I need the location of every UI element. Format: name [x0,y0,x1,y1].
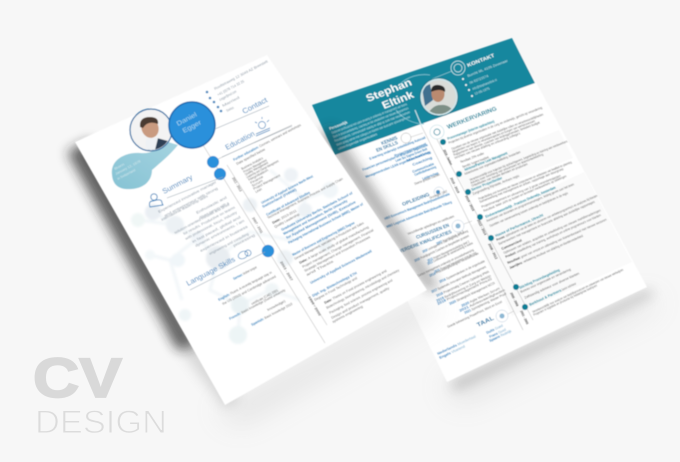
job entries [447,106,624,317]
name: Stephan Eltink: Stephan [364,78,414,105]
education entries: Quality Management [244,161,269,176]
courses list: 2015 Financieel management voor de zorg [434,251,477,274]
education entries: Biotechnology, bioengineering, microbiology and chemistry [325,268,400,310]
education entries: General Management, specializing in Production and Sales [293,221,365,261]
courses list: Goede beheersing PowerPoint, Word en Excel [447,300,503,329]
courses list: 2007 Avondcursus Jaar 3 [436,230,465,246]
skills list: Lean Six Sigma Green Belt [395,147,429,163]
timeline date labels: 2001 - 2005 [519,310,529,325]
education entries: Process Management [242,158,268,174]
language list: Engels Vloeiend [439,344,466,360]
drop caption: Born [113,162,125,171]
education entries: Date: Thesis on Food process engineering and [323,269,388,305]
icon: person [149,194,163,207]
timeline date labels [231,177,322,317]
education entries: Negotiation [247,168,269,182]
language list: the US (2010) and Cambridge advanced [221,274,277,306]
summary text: processing [232,233,256,248]
drop caption: January 12, 1978 [114,159,141,176]
summary text: Enthusiastic and [195,196,228,215]
job entries: Procesmanager (Interim opdrachten) [447,119,496,141]
job entries: Resultaat: beter zicht op kosten en tevreden medewerkers op afdelingen [483,174,567,213]
timeline date labels: 2005 - 2008 [509,292,519,307]
personal statement: Gedreven professional met ruime ervaring in onderwijs en management van teams [331,102,408,135]
courses list: 2019 Projectmanagement Prince2 [437,277,493,306]
education list: HBO Economisch Management Bedrijfsadministratie [384,192,451,221]
job entries: Senior Projectleider [471,176,504,192]
skills heading [375,133,423,154]
icon: bulb [255,117,270,136]
contact list: Married [221,96,240,108]
name circle: Daniel [175,111,198,128]
job entries: Begeleiden van teams in verandertrajecten en borgen van werkprocessen [452,119,536,154]
education entries: Project management, Change management, Financial [301,228,375,269]
personal statement: Resultaatgericht, communicatief vaardig en altijd op zoek naar nieuwe kansen [334,110,411,143]
personal statement: Sterk in procesverbetering, coaching en het ontwikkelen van nieuwe programma's [332,106,409,139]
language list: Spanish: Basic knowledge 2010 [250,302,293,327]
contact list: Rooftstraweg 12 3049 AZ Breestelt [213,60,269,91]
education list: Verschillende opleidingen en certificaten [407,214,455,236]
left sheet paper [75,55,427,405]
education entries: University of Applied Sciences Wadenswil [309,249,373,285]
education entries: Design and product management, quality [330,286,390,320]
job entries: Eindverantwoordelijk - Practices Onderwijs, Amsterdam [485,186,557,219]
name circle: Egger [181,119,204,135]
timeline date labels: 2014 - 2016 [464,195,475,212]
education entries: Quality Leadership [273,212,300,229]
job entries: Advies over inrichting van processen en teamontwikkeling [470,152,544,185]
skills list: Marketing [406,150,431,163]
summary text: engineering and consulting [208,232,249,256]
education list [384,189,455,236]
job entries: Verantwoordelijk voor analyse van bedrijfsprocessen en ontwerpen van nieuwe werkwijzen [532,268,624,314]
education entries: Business Analytics [240,156,264,171]
summary text: Experienced innovative manager [157,180,218,214]
education entries: Packaging, food science, process engineering and [328,278,393,315]
CV: CV [33,346,122,409]
education entries: Finance [249,175,264,185]
heading: contact: Contact [240,95,269,116]
faint section bands [455,130,632,316]
personal statement: Persoonlijk [329,120,349,131]
courses list: 2021 Adviesvaardigheden [459,288,506,313]
right sheet paper [312,38,647,382]
job entries: Zelfstandig adviseur voor diverse klanten [524,271,580,300]
job entries: House of Performance, Utrecht [495,213,545,238]
contact icon [451,61,465,75]
drop caption: in Switzerland [116,168,136,181]
summary text: in fast paced, global and [191,215,241,244]
photo: Stephan portrait [396,71,460,127]
heading: education: Education [223,129,256,152]
language list: Nederlands Moedertaal [437,334,477,356]
heading: contact [215,95,269,129]
contact block: Burcht 96, 4105 Zevenaar [467,58,509,78]
skills list: Financien personeelsplan en afspraken organisatie [362,143,429,172]
skills list: Coaching [412,156,433,167]
job entries: Bureau voor organisatie en verandering [520,267,572,294]
summary text: solution-oriented mindset and drive [173,203,230,235]
courses list: 2021 Sprintplanning, Master Proof [464,292,507,315]
personal statement [329,102,411,151]
language heading: TAAL [476,316,496,329]
summary text [157,180,256,256]
education entries: Certificate of Advanced Studies [265,191,311,217]
job entries: Aansturen van docenten en programmamanagers, leiding geven aan het team [486,182,575,223]
name: Stephan Eltink: Eltink [380,90,416,112]
education entries: Further education: Courses, seminars and workshops [232,123,302,162]
courses list: 2010 Praktijkgericht Coachen en Begeleiden groepen [414,234,470,263]
timeline date labels: 2008 - 2012 [487,243,498,260]
drop caption [113,159,141,181]
contact block: KONTAKT [466,53,496,69]
education entries: Management and Innovation, Berlin University [282,199,348,236]
education entries: Dipl. Ing. Biotechnology ETH [311,271,358,298]
language list: Duits Goed [486,324,504,335]
contact list [206,60,269,113]
summary text: and entrepreneur with strong [163,186,219,218]
summary text: international leadership skills [160,194,209,222]
skills list: Managementrollen LEAN organisatieontwikkeling [365,150,432,179]
language heading [476,310,514,329]
left sheet shadow [215,294,438,426]
courses list: 2012 Hogere Managementopleiding deel 2 [427,240,470,263]
education entries: for Applied Management (SHB), Executive [285,200,357,240]
job entries: Samenwerken met management en financiele afdeling aan duidelijke rapportages [498,200,596,246]
courses list: 2013 Communicatie en samenwerking in teams [427,241,474,266]
heading: language skills: Language Skills [184,255,237,288]
courses list: 2019 Bedrijfsvoering in Zorg en Welzijn [436,274,492,303]
timeline date labels: 2011 - 2013 [231,177,243,192]
courses heading: VERDERE KWALIFICATIES [398,229,453,255]
education entries: systems engineering [331,305,364,324]
education entries: Degree in Food Technology and [313,276,358,302]
timeline date labels: 2003 - 2007 [279,261,294,282]
job entries: Opbouwen van relaties, acquisitie en ontwikkeling van nieuwe marktbenaderingen [503,208,602,255]
teal name drop [112,142,178,189]
education entries: Technical Management, Business Process and Supply Chain [266,177,344,220]
job entries: Adviesbureau voor organisatieontwikkeling, Amsterdam [464,150,521,176]
language list [437,324,512,360]
job entries: Bereikt: hogere kwaliteit [462,155,490,169]
education entries: Project Management [252,173,281,191]
teal header band [312,38,535,155]
education entries: Lean [254,187,263,194]
job entries: Verantwoordelijk voor trajecten bij opdrachtgevers, begeleiding en training van medewerkers [469,139,568,182]
skills list: Communicatie [412,162,435,174]
timeline date labels: 2012 - 2014 [476,219,487,236]
language list: Frans Goed [489,328,507,339]
personal statement: uiteenlopende organisaties [337,132,378,151]
education entries: Leadership and Change Management [245,159,279,179]
contact block: info@stephaneltink.nl [472,78,498,91]
contact block [462,53,509,97]
job entries: Stichting Procesbegeleiding [519,268,561,290]
contact block: 06 83721574 [469,74,489,85]
contact block: 12-05-1975 [474,86,490,96]
job entries: Resultaat: groei van omzet en uitbreiding van klantenbestand met nieuwe sectoren [507,218,607,265]
education list: Groningen 1997 [429,189,448,200]
contact list: d.egger@mail.com [218,90,237,102]
education entries: Strategic Management and Innovation Processes [303,235,371,273]
courses heading [398,220,472,255]
skills list: Diverse groepen coachen [414,173,441,186]
courses heading: CURSUSSEN EN [415,223,451,241]
job entries: Proces: optimaliseren van de keten en uitvoeren van verbeterprogramma's en analyses bij klanten [496,194,598,242]
language list: French: Basic knowledge (Swiss university [228,288,287,321]
contact list: Swiss [225,106,235,113]
work experience heading: WERKERVARING [446,106,499,131]
job entries: Adviseur/Partner Lean Management [464,151,509,172]
timeline date labels: 1996 - 2000 [307,296,322,317]
language list: knowledge) [266,299,286,312]
job entries: Rapporteren aan directie, coachen van leidinggevenden, bewaken budget [453,121,541,157]
job entries: Opzetten van samenwerking tussen onderwijs en bedrijfsleven in de regio [489,191,569,228]
education entries: Date specified below [235,147,266,166]
summary text: experienced in business [199,225,249,253]
timeline date labels [442,149,529,325]
job entries: Berkhout & Partners [529,288,562,307]
courses list: 2018 Projectmatig Creeren Opleiding IPMA [436,269,491,298]
education entries [232,123,400,324]
language list: certificate (CAE) 2001 [250,288,279,306]
summary text: dynamic environments. I am [194,219,245,248]
heading: summary: Summary [160,172,194,196]
photo: Daniel portrait [130,109,175,155]
job entries: Samenwerking met management en artsen, rapportage aan stuurgroep [479,167,564,204]
courses list: 2020 Strategisch Management NCOI [449,281,496,306]
timeline dots [207,156,274,257]
job entries: Opzetten van de nieuwe organisatie met duidelijke rollen en verantwoordelijkheden [451,112,544,151]
job entries: Jaarcijfers: verbetering resultaat van afdeling en klanttevredenheid [509,234,584,270]
education entries: Scrum [251,179,264,188]
timeline dots [440,139,528,310]
courses list: 2017 Systematic Innovation Methods Management [431,265,487,294]
education heading [401,187,444,208]
heading: education [222,117,292,157]
education entries: Packaging International Business School (MBE), Master of [287,202,364,245]
job entries: Commercieel [501,238,523,251]
job entries: Resultaat: 20% sneller [460,151,485,164]
job entries: Product: ontwikkeling van training, workshops en online programma's voor klanten [505,213,602,259]
education entries: University of Applied Science North-West [260,174,314,205]
summary text: with professional, focus, industry [184,210,238,241]
skills list: Projectmanagement [394,142,428,158]
education entries: Date: A large scale study of global manufacturing [298,225,370,265]
education entries: and Thesis [305,259,335,277]
courses list: Cursus management onderwijs en procesbeheersing [417,248,475,278]
DESIGN: DESIGN [35,404,167,440]
language list: English: Fluent. A recently language stay in [217,270,273,302]
panel: right CV sheet [312,38,660,405]
courses list: 2020 Agile Werken Scrum [461,286,501,308]
education entries: Date: 2010-2011 [271,209,298,225]
heading: language skills [184,249,265,290]
education heading: OPLEIDING [401,192,431,208]
education entries: Master of Business and Engineering (MBE) Degree [291,221,355,257]
job entries: Inrichten van nieuwe afdeling en onboarding collega's [454,131,521,160]
timeline date labels: 2007 - 2011 [251,217,264,234]
language list [217,265,293,327]
job entries: Ontwikkelen van nieuwe diensten en producten [471,162,528,188]
skills list: Conflictbeheersing [414,165,437,177]
courses list [414,229,507,329]
right sheet shadow [440,295,660,405]
heading: summary [149,172,223,207]
education list: MBO Logistiek Administratie Bedrijfskunde Tilburg [386,200,453,229]
courses list: 2016 Systeemdenken in de organisatie [439,259,486,284]
brand wordmark: CV DESIGN [33,346,167,440]
job entries: Projecten in logistiek en productie bij middelgrote bedrijven [533,284,598,317]
timeline date labels: 2019 - heden [442,149,453,166]
timeline rails [422,127,533,330]
name circle [169,102,215,148]
summary text: for results. Productive on teams [182,205,236,236]
personal statement: Werkt graag samen met collega's en klanten aan duurzame oplossingen voor [336,115,411,147]
skills list: E-learning onderwijs ontwikkeling Autocad [369,136,426,161]
icon: speech bubbles [237,249,252,260]
molecule watermark [131,168,338,344]
education entries: Graduate University Berlin, Steinbeis School of [280,191,354,232]
job entries: Projectleiding voor invoering van nieuwe zorgsystemen en verbeteren van kwaliteit en planning [478,160,573,201]
courses list: 2016 Procesbegeleiding en veranderkunde [429,251,479,278]
skills heading: EN SKILLS [375,140,400,154]
skills list: Leiderschap [422,171,440,181]
job entries: Zorginstelling Rijnstate, Arnhem regio [472,174,520,196]
name: Stephan Eltink [364,78,416,112]
timeline rails [203,125,327,343]
skills list [362,136,441,186]
courses list: 2010 Leidinggeven in Lean omgeving en training [422,229,469,254]
contact list: +41 (0)78 714 32 25 [216,79,245,97]
skills heading: KENNIS [380,135,399,147]
language list: German: Mother tongue [232,265,258,281]
job entries: Junior adviseur [561,281,578,292]
education entries: Switzerland (FHNW) [261,187,298,209]
panel: left CV sheet [67,55,438,426]
summary text: driven person with a [198,201,230,220]
timeline date labels: 2016 - 2019 [449,177,460,194]
job entries: Projecten bij diverse organisaties in de zorg en onderwijs, gericht op verandering [448,106,543,145]
job entries: Projectmanagement en uitvoering van 3 grote verandertrajecten [481,174,562,209]
language list: Spaans Redelijk [489,329,512,343]
work experience heading [430,106,499,139]
